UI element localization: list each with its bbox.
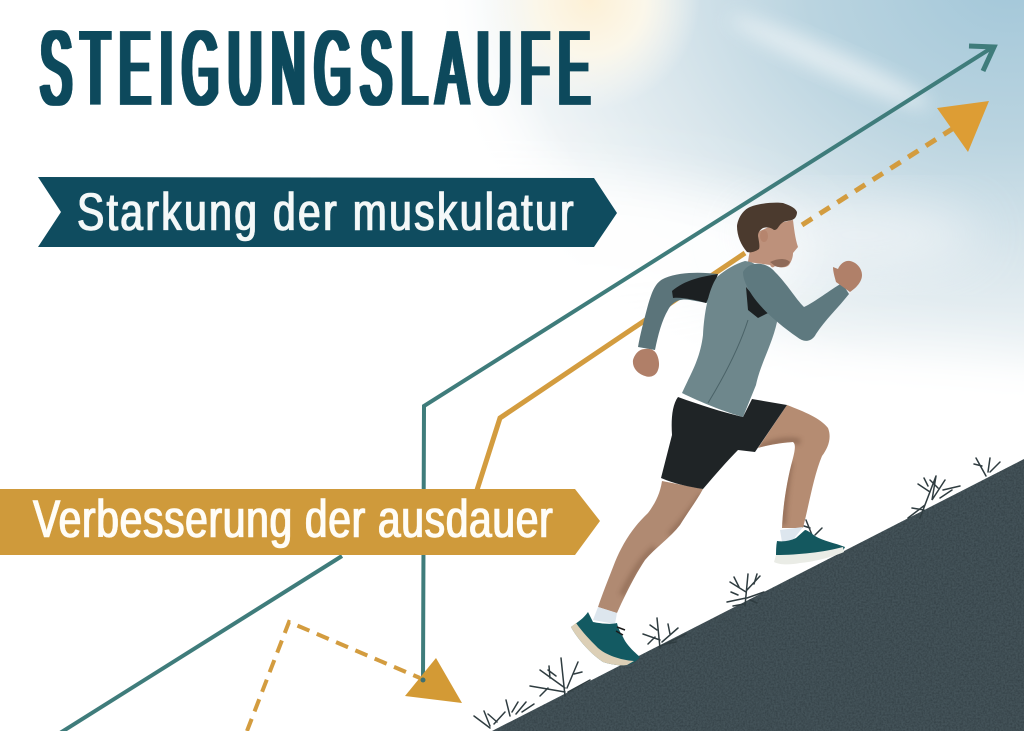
icon: gold arrowhead lower bbox=[405, 658, 462, 703]
ear bbox=[760, 230, 768, 242]
gold solid and dashed rising line bbox=[477, 124, 960, 490]
teal line end dot bbox=[420, 678, 426, 682]
front leg bbox=[758, 405, 830, 528]
hair bbox=[737, 203, 797, 252]
icon: gold arrowhead upper bbox=[937, 101, 989, 152]
title: STEIGUNGSLAUFE bbox=[40, 10, 590, 128]
rear arm bbox=[638, 273, 718, 350]
front fist bbox=[833, 261, 862, 292]
black shorts bbox=[661, 397, 787, 489]
icon: shrubs on the slope bbox=[474, 458, 1000, 728]
runner bbox=[571, 203, 862, 665]
hillside bbox=[492, 459, 1024, 731]
rear leg shading bbox=[622, 495, 702, 595]
front arm bbox=[743, 264, 849, 341]
rear fist bbox=[633, 349, 659, 377]
front shoe bbox=[774, 530, 845, 564]
gold dashed lower line bbox=[247, 622, 420, 731]
beard shadow bbox=[770, 259, 790, 267]
shirt torso bbox=[682, 261, 777, 417]
black underarm panel bbox=[672, 274, 718, 303]
front leg shading bbox=[760, 440, 800, 525]
rear sock bbox=[593, 607, 617, 624]
rear shoe bbox=[571, 612, 640, 665]
front sock bbox=[780, 527, 803, 542]
black armpit panel bbox=[746, 287, 768, 318]
neck and face bbox=[748, 220, 798, 267]
shirt seam bbox=[708, 320, 748, 403]
banner: Verbesserung der ausdauer: Verbesserung der ausdauer bbox=[33, 490, 553, 549]
banner: Starkung der muskulatur: Starkung der muskulatur bbox=[77, 183, 574, 242]
rear leg bbox=[598, 481, 703, 613]
